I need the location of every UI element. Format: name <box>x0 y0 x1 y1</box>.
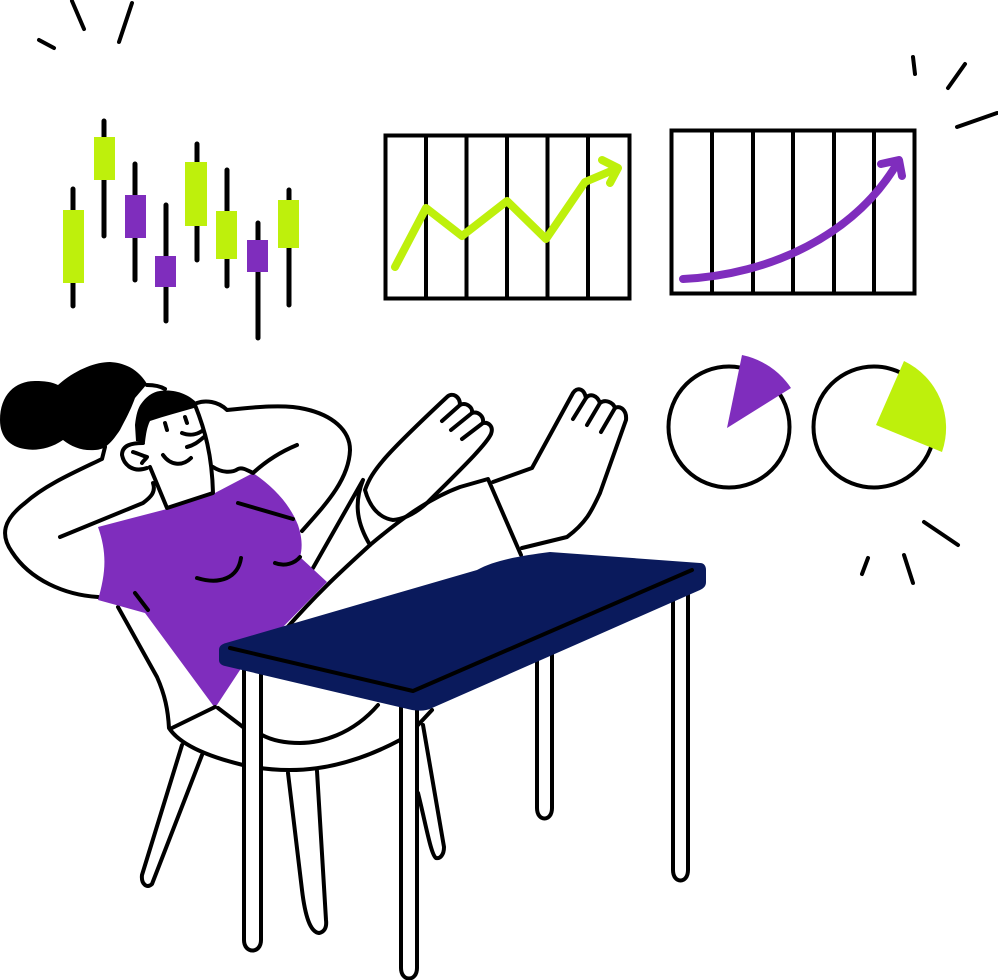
thigh outline <box>285 479 521 630</box>
left arm behind head <box>5 447 105 597</box>
nose lines <box>182 431 204 447</box>
back table leg: left <box>537 640 552 818</box>
table edge line <box>230 570 692 691</box>
chair shell <box>118 607 440 770</box>
far leg and foot <box>493 389 626 548</box>
back table leg: right <box>673 590 688 880</box>
pie chart: green slice <box>814 361 946 488</box>
ponytail <box>0 362 147 450</box>
right arm fill <box>197 403 350 531</box>
under-thigh lines <box>172 705 432 743</box>
near foot <box>365 395 492 520</box>
face <box>143 405 213 508</box>
sparkle lines: top right <box>913 57 997 127</box>
table top <box>219 552 706 711</box>
chair <box>118 607 444 933</box>
shirt folds <box>135 503 300 610</box>
smile <box>163 455 191 464</box>
eyes <box>165 417 187 430</box>
candlestick chart <box>63 121 299 338</box>
front table leg: left <box>244 665 261 950</box>
line chart with purple growth curve <box>672 130 914 294</box>
front table leg: right <box>401 700 417 978</box>
woman <box>0 362 626 743</box>
chair outline <box>118 607 400 770</box>
pie chart: purple slice <box>668 355 791 488</box>
chair leg: right <box>418 725 444 858</box>
left arm fill <box>12 459 155 597</box>
shirt <box>98 473 327 708</box>
headband <box>147 385 165 389</box>
fringe hair <box>135 391 197 442</box>
near foot toes <box>442 405 483 439</box>
trousers fill <box>215 479 522 743</box>
chair leg: middle <box>288 771 326 933</box>
right arm behind head <box>197 401 350 531</box>
sparkle lines: bottom right <box>862 522 958 583</box>
calf lines <box>313 480 370 568</box>
inner ear <box>133 452 147 463</box>
chair leg: left <box>142 745 202 886</box>
ear <box>122 443 147 470</box>
line chart with green zigzag arrow <box>386 135 630 299</box>
sparkle lines: top left <box>39 1 132 48</box>
face outline <box>150 405 213 508</box>
arm inner lines <box>60 445 297 537</box>
far foot toes <box>573 398 615 432</box>
